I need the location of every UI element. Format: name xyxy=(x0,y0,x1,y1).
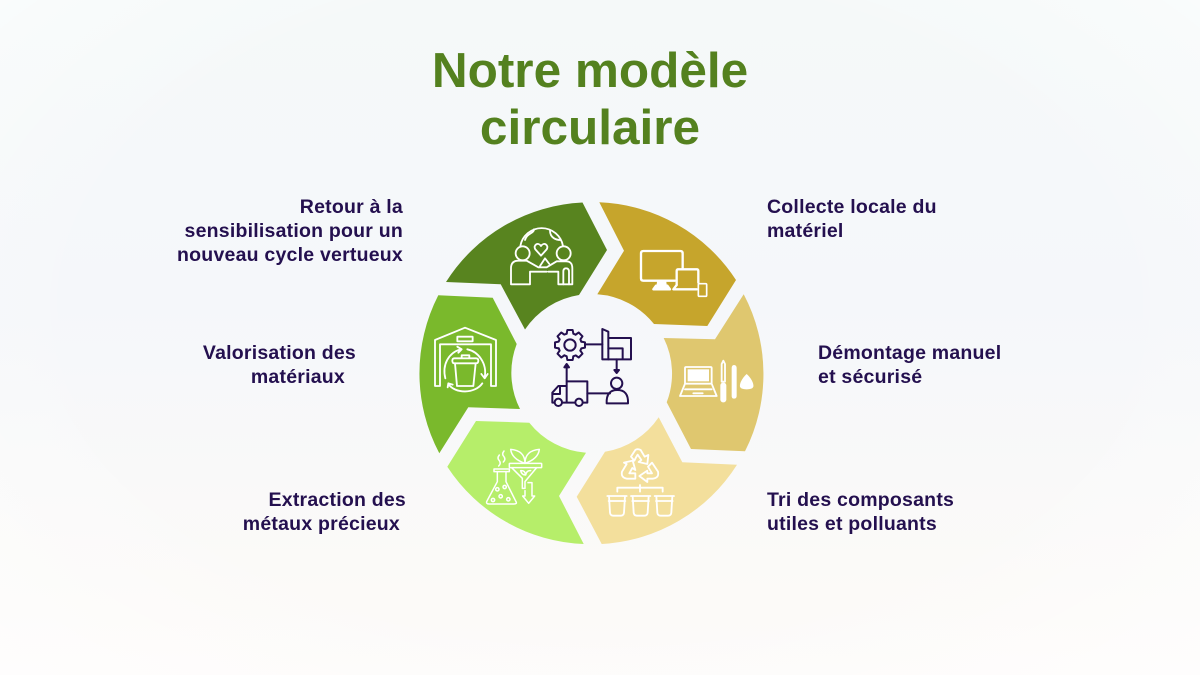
label: local collection xyxy=(767,196,937,242)
label: return to awareness: sensibilisation pour un xyxy=(184,220,403,242)
label: manual dismantling: Démontage manuel xyxy=(818,342,1001,364)
icon: recycling and bins xyxy=(607,449,674,516)
gear xyxy=(555,330,585,360)
segment: return to awareness xyxy=(446,202,607,330)
label: metal extraction: Extraction des xyxy=(269,489,406,511)
icon: people and globe xyxy=(511,228,572,284)
label: sorting: utiles et polluants xyxy=(767,513,937,535)
label: return to awareness: Retour à la xyxy=(300,196,403,218)
icon: flask and funnel xyxy=(487,449,542,504)
icon: laptop and tools xyxy=(680,361,753,402)
label: local collection: Collecte locale du xyxy=(767,196,937,218)
label: manual dismantling: et sécurisé xyxy=(818,366,922,388)
label: material recovery: matériaux xyxy=(251,366,345,388)
cycle diagram xyxy=(419,202,763,544)
label: return to awareness xyxy=(177,196,403,266)
label: return to awareness: nouveau cycle vertueux xyxy=(177,244,403,266)
icon: warehouse and bin xyxy=(435,328,496,391)
title: Notre modèle xyxy=(432,43,748,98)
segment: manual dismantling xyxy=(664,294,763,451)
segment: sorting xyxy=(577,417,737,544)
segment: local collection xyxy=(597,202,736,326)
label: sorting xyxy=(767,489,954,535)
segment: metal extraction xyxy=(447,421,586,544)
segment: material recovery xyxy=(419,295,520,453)
title xyxy=(432,43,748,155)
title: circulaire xyxy=(480,100,700,155)
icon: computer devices xyxy=(641,251,707,296)
label: sorting: Tri des composants xyxy=(767,489,954,511)
label: metal extraction: métaux précieux xyxy=(243,513,400,535)
icon: centre process loop xyxy=(552,329,631,406)
label: manual dismantling xyxy=(818,342,1001,388)
label: material recovery xyxy=(203,342,356,388)
label: material recovery: Valorisation des xyxy=(203,342,356,364)
label: local collection: matériel xyxy=(767,220,844,242)
label: metal extraction xyxy=(243,489,406,535)
